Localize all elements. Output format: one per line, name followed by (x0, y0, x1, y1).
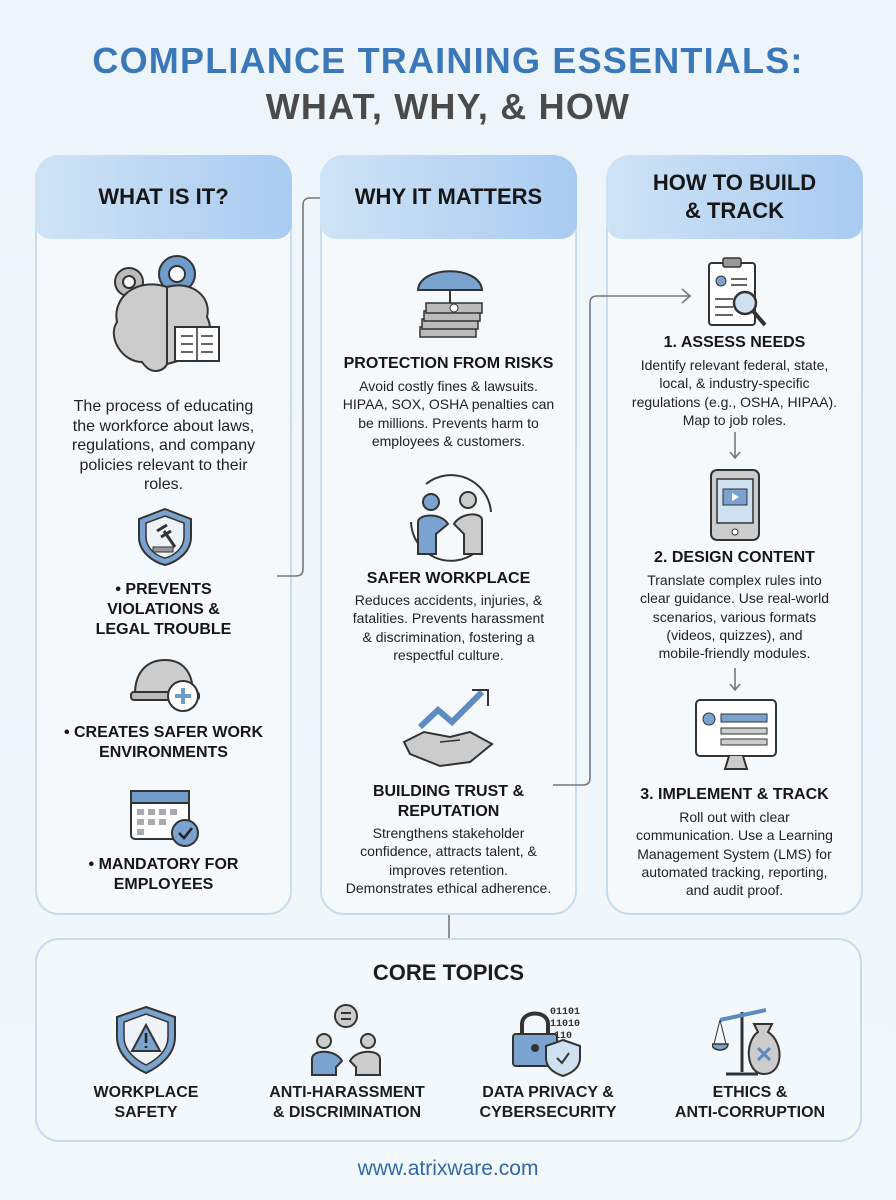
text: mandatory (89, 856, 238, 893)
icon: clipboard search (708, 257, 766, 326)
panel: why it matters: Strengthens stakeholder (373, 825, 524, 841)
title (92, 40, 804, 127)
text: prevents violations: • PREVENTS (115, 581, 212, 598)
panel: how to build: automated tracking, reporting, (642, 864, 828, 880)
panel: why it matters: confidence, attracts talent, & (360, 843, 537, 859)
label: data privacy: CYBERSECURITY (480, 1104, 616, 1121)
text: building trust (373, 783, 524, 820)
label: anti-harassment: ANTI-HARASSMENT (269, 1084, 425, 1101)
heading: core topics: CORE TOPICS (373, 960, 524, 985)
icon: data privacy lock: 110 (554, 1031, 572, 1042)
label: workplace safety: WORKPLACE (94, 1084, 198, 1101)
icon: calendar (130, 790, 199, 847)
panel: why it matters: Reduces accidents, injuries, & (355, 592, 542, 608)
text: design content: 2. DESIGN CONTENT (654, 549, 815, 566)
heading: how to build: HOW TO BUILD (653, 170, 816, 195)
panel: how to build: mobile-friendly modules. (659, 645, 810, 661)
panel: why it matters: & discrimination, fostering a (363, 629, 534, 645)
panel: why it matters: employees & customers. (372, 433, 525, 449)
panel: how to build: regulations (e.g., OSHA, HIPAA). (632, 394, 837, 410)
panel: how to build: local, & industry-specific (659, 375, 810, 391)
text: prevents violations (96, 581, 231, 638)
panel: why it matters: fatalities. Prevents harassment (353, 610, 544, 626)
text: definition (72, 398, 256, 493)
text: assess needs: 1. ASSESS NEEDS (664, 334, 805, 351)
icon: monitor checklist (695, 699, 777, 770)
icon: shield gavel (138, 508, 192, 566)
icon: data privacy lock: 01101 (550, 1007, 580, 1018)
panel: how to build (606, 155, 863, 915)
panel: how to build: Translate complex rules into (647, 572, 822, 588)
text: safer environments: ENVIRONMENTS (99, 744, 228, 761)
text: safer workplace: SAFER WORKPLACE (367, 570, 530, 587)
label: ethics (675, 1084, 825, 1121)
panel: how to build: communication. Use a Learning (636, 827, 833, 843)
heading: why it matters: WHY IT MATTERS (355, 184, 542, 209)
label: data privacy (480, 1084, 616, 1121)
panel: what is it (35, 155, 292, 915)
text: protection: PROTECTION FROM RISKS (344, 355, 553, 372)
label: anti-harassment (269, 1084, 425, 1121)
panel: how to build: and audit proof. (686, 882, 783, 898)
icon: brain with gears (112, 255, 220, 372)
icon: umbrella money (416, 270, 484, 338)
text: prevents violations: LEGAL TROUBLE (96, 621, 231, 638)
heading: what is it (35, 155, 292, 239)
icon: data privacy lock (512, 1007, 581, 1077)
label: workplace safety (94, 1084, 198, 1121)
heading: what is it: WHAT IS IT? (98, 184, 229, 209)
text: building trust: REPUTATION (398, 803, 499, 820)
panel: why it matters (320, 155, 577, 915)
panel: how to build: Management System (LMS) for (637, 846, 832, 862)
panel: how to build: clear guidance. Use real-world (640, 590, 829, 606)
panel: how to build: Identify relevant federal, state, (641, 357, 828, 373)
panel: why it matters: HIPAA, SOX, OSHA penalties can (343, 396, 554, 412)
panel: why it matters: respectful culture. (393, 647, 504, 663)
panel: how to build: Roll out with clear (679, 809, 790, 825)
panel: why it matters: be millions. Prevents harm to (358, 415, 539, 431)
text: building trust: BUILDING TRUST & (373, 783, 524, 800)
label: anti-harassment: & DISCRIMINATION (273, 1104, 421, 1121)
text: definition: the workforce about laws, (73, 418, 254, 434)
text: definition: roles. (144, 476, 183, 493)
icon: handshake circle (410, 474, 492, 562)
label: data privacy: DATA PRIVACY & (482, 1084, 614, 1101)
icon: tablet video (710, 469, 760, 541)
text: implement track: 3. IMPLEMENT & TRACK (640, 786, 829, 803)
text: safer environments: • CREATES SAFER WORK (64, 724, 263, 741)
text: definition: The process of educating (74, 398, 253, 415)
title: WHAT, WHY, & HOW (266, 86, 630, 127)
heading: why it matters (320, 155, 577, 239)
label: workplace safety: SAFETY (114, 1104, 178, 1121)
icon: ethics scale (712, 1008, 781, 1076)
icon: anti-harassment (311, 1004, 381, 1076)
panel: core topics (35, 938, 862, 1142)
text: mandatory: EMPLOYEES (114, 876, 213, 893)
text: definition: policies relevant to their (79, 456, 248, 474)
panel: how to build: scenarios, various formats (653, 609, 816, 625)
text: prevents violations: VIOLATIONS & (107, 601, 220, 618)
label: ethics: ETHICS & (713, 1084, 787, 1101)
heading: how to build: & TRACK (685, 198, 784, 223)
title: COMPLIANCE TRAINING ESSENTIALS: (92, 40, 804, 81)
icon: handshake growth (402, 689, 494, 767)
icon: data privacy lock: 11010 (550, 1019, 580, 1030)
panel: how to build: Map to job roles. (683, 412, 786, 428)
icon: workplace safety shield (116, 1006, 176, 1074)
footer url: www.atrixware.com (358, 1157, 538, 1180)
panel: why it matters: Avoid costly fines & lawsuits. (359, 378, 538, 394)
text: mandatory: • MANDATORY FOR (89, 856, 238, 873)
label: ethics: ANTI-CORRUPTION (675, 1104, 825, 1121)
heading: how to build (606, 155, 863, 239)
panel: why it matters: improves retention. (389, 862, 508, 878)
panel: how to build: (videos, quizzes), and (666, 627, 803, 643)
text: definition: regulations, and company (72, 437, 255, 454)
icon: hard hat (130, 659, 200, 712)
text: safer environments (64, 724, 263, 761)
panel: why it matters: Demonstrates ethical adherence. (346, 880, 551, 896)
